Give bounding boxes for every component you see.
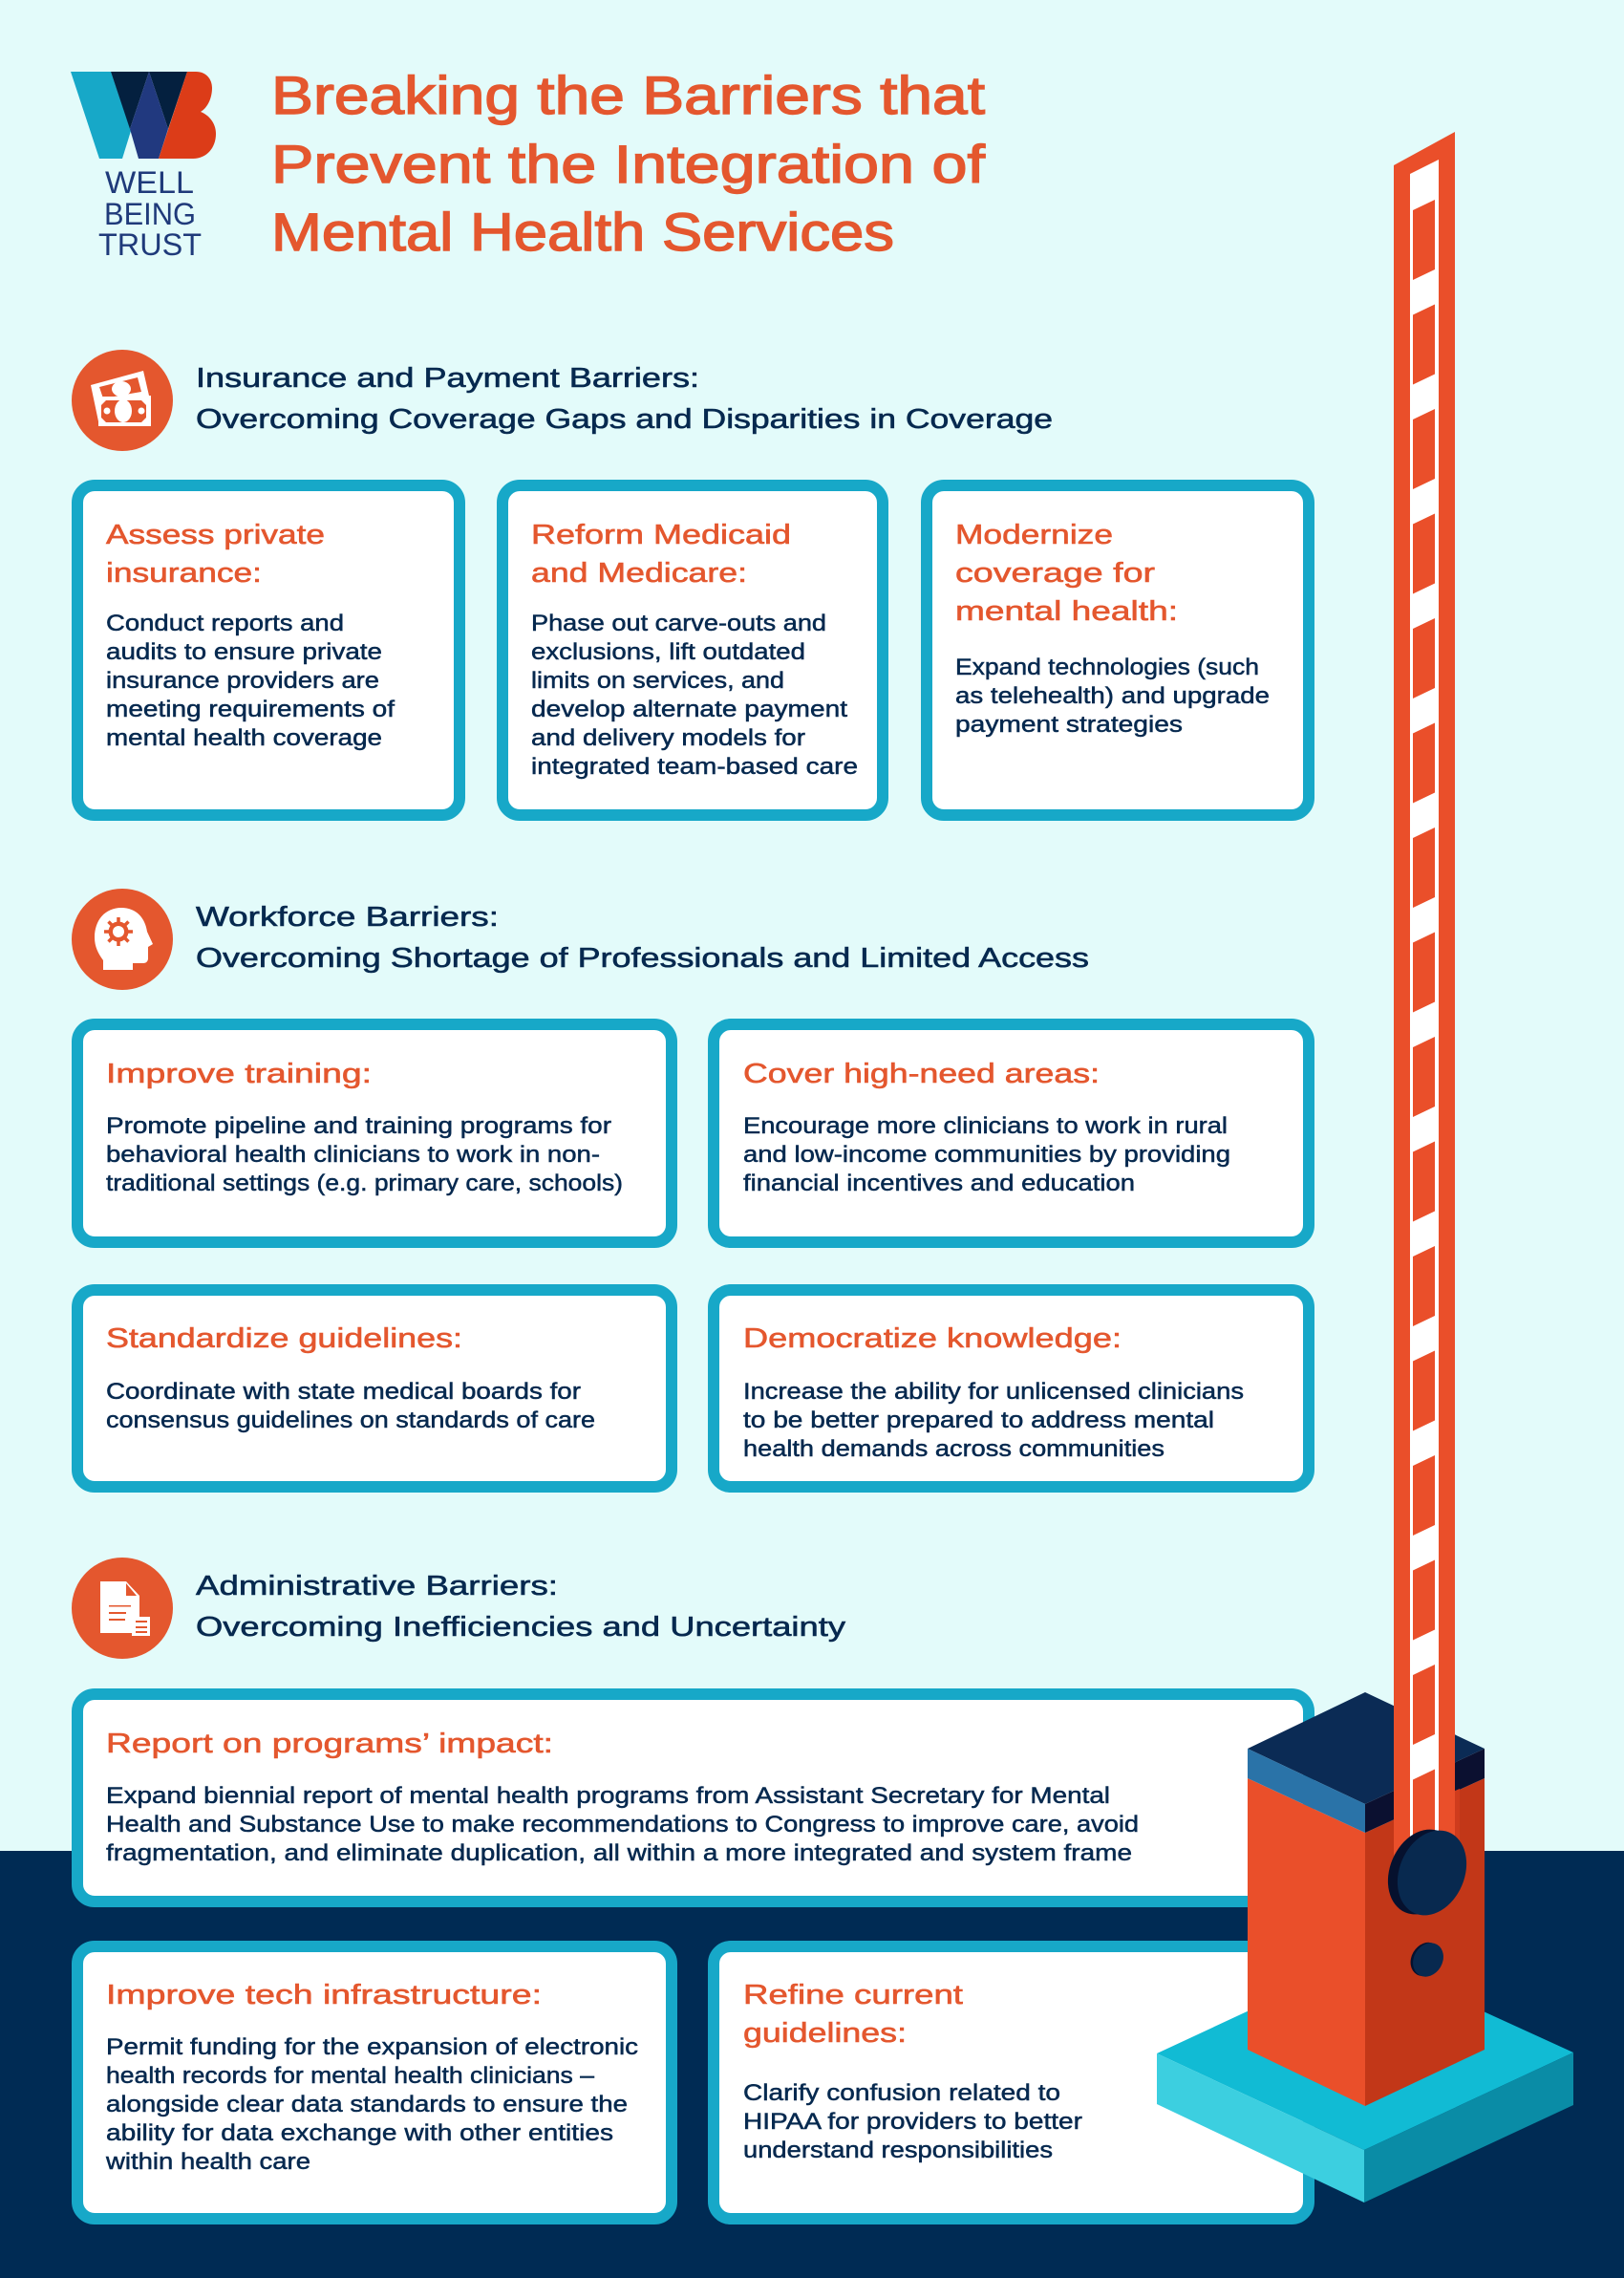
panel: assess private insurance: Assess private: [106, 520, 325, 550]
panel: assess private insurance: insurance:: [106, 558, 262, 589]
panel: reform Medicaid and Medicare: Reform Medicaid: [531, 520, 791, 550]
panel: standardize guidelines: [77, 1290, 672, 1487]
panel: cover high-need areas: [714, 1024, 1309, 1242]
panel: assess private insurance: audits to ensure private: [106, 639, 382, 665]
panel: refine current guidelines: guidelines:: [743, 2018, 907, 2049]
panel: modernize coverage for mental health: [927, 485, 1309, 815]
gate post box: [1248, 1692, 1485, 2106]
panel: reform Medicaid and Medicare: limits on services, and: [531, 668, 784, 694]
section heading: insurance and payment barriers: Overcoming Coverage Gaps and Disparities in Coverage: [196, 404, 1053, 435]
pivot knob: [1376, 1818, 1479, 1926]
panel: reform Medicaid and Medicare: Phase out carve-outs and: [531, 611, 826, 636]
panel: assess private insurance: insurance providers are: [106, 668, 379, 694]
panel: improve tech infrastructure: Improve tech infrastructure:: [106, 1980, 542, 2010]
logo: Well Being Trust: TRUST: [98, 227, 202, 262]
panel: reform Medicaid and Medicare: and Medicare:: [531, 558, 747, 589]
panel: reform Medicaid and Medicare: [502, 485, 883, 815]
panel: refine current guidelines: Clarify confusion related to: [743, 2080, 1060, 2106]
small knob: [1404, 1937, 1449, 1983]
panel: modernize coverage for mental health: coverage for: [955, 558, 1155, 589]
panel: democratize knowledge: health demands across communities: [743, 1436, 1165, 1462]
logo: Well Being Trust: [71, 72, 216, 262]
panel: improve training: [77, 1024, 672, 1242]
panel: modernize coverage for mental health: Modernize: [955, 520, 1113, 550]
panel: report on programs' impact: Expand biennial report of mental health programs from Assistant Secretary for Mental: [106, 1783, 1110, 1809]
panel: improve tech infrastructure: ability for data exchange with other entities: [106, 2120, 613, 2146]
panel: cover high-need areas: financial incentives and education: [743, 1171, 1135, 1196]
section heading: workforce barriers: [72, 889, 1089, 990]
panel: modernize coverage for mental health: Expand technologies (such: [955, 655, 1259, 680]
section heading: administrative barriers: Administrative Barriers:: [196, 1571, 558, 1601]
panel: democratize knowledge: [714, 1290, 1309, 1487]
panel: report on programs' impact: [77, 1694, 1309, 1902]
panel: standardize guidelines: Coordinate with state medical boards for: [106, 1379, 581, 1405]
panel: modernize coverage for mental health: as telehealth) and upgrade: [955, 683, 1270, 709]
gate base platform: [1157, 1957, 1573, 2203]
panel: improve tech infrastructure: health records for mental health clinicians –: [106, 2063, 595, 2089]
panel: assess private insurance: Conduct reports and: [106, 611, 344, 636]
panel: standardize guidelines: Standardize guidelines:: [106, 1323, 462, 1354]
logo: Well Being Trust: BEING: [104, 197, 196, 231]
panel: reform Medicaid and Medicare: integrated team-based care: [531, 754, 858, 780]
panel: reform Medicaid and Medicare: and delivery models for: [531, 725, 805, 751]
panel: improve training: Promote pipeline and training programs for: [106, 1113, 611, 1139]
panel: cover high-need areas: Encourage more clinicians to work in rural: [743, 1113, 1228, 1139]
panel: report on programs' impact: fragmentation, and eliminate duplication, all within a more integrated and system frame: [106, 1840, 1132, 1866]
panel: modernize coverage for mental health: mental health:: [955, 596, 1178, 627]
icon: head with gear: [95, 908, 153, 970]
panel: assess private insurance: [77, 485, 459, 815]
title: Mental Health Services: [271, 202, 894, 262]
panel: refine current guidelines: understand responsibilities: [743, 2138, 1053, 2163]
section heading: administrative barriers: [72, 1558, 846, 1659]
panel: report on programs' impact: Report on programs’ impact:: [106, 1729, 553, 1759]
panel: improve tech infrastructure: within health care: [105, 2149, 310, 2175]
panel: standardize guidelines: consensus guidelines on standards of care: [106, 1408, 595, 1433]
panel: improve training: traditional settings (e.g. primary care, schools): [106, 1171, 623, 1196]
panel: assess private insurance: mental health coverage: [106, 725, 382, 751]
panel: improve tech infrastructure: [77, 1946, 672, 2219]
section heading: workforce barriers: Workforce Barriers:: [196, 902, 499, 933]
icon: document: [100, 1581, 150, 1636]
panel: democratize knowledge: Democratize knowledge:: [743, 1323, 1122, 1354]
panel: democratize knowledge: to be better prepared to address mental: [743, 1408, 1214, 1433]
section heading: administrative barriers: Overcoming Inefficiencies and Uncertainty: [196, 1612, 846, 1643]
title: [271, 65, 986, 262]
panel: cover high-need areas: and low-income communities by providing: [743, 1142, 1230, 1168]
icon: money bills: [91, 371, 151, 426]
panel: modernize coverage for mental health: payment strategies: [955, 712, 1183, 738]
panel: improve training: Improve training:: [106, 1059, 372, 1089]
panel: cover high-need areas: Cover high-need areas:: [743, 1059, 1100, 1089]
title: Prevent the Integration of: [271, 134, 986, 194]
logo: Well Being Trust: WELL: [105, 165, 194, 200]
panel: improve tech infrastructure: alongside clear data standards to ensure the: [106, 2092, 628, 2117]
panel: improve tech infrastructure: Permit funding for the expansion of electronic: [106, 2034, 638, 2060]
panel: refine current guidelines: [714, 1946, 1309, 2219]
panel: reform Medicaid and Medicare: develop alternate payment: [531, 697, 847, 722]
section heading: workforce barriers: Overcoming Shortage of Professionals and Limited Access: [196, 943, 1089, 974]
striped barrier arm: [1394, 132, 1455, 1859]
barrier gate illustration: [1157, 132, 1573, 2203]
panel: improve training: behavioral health clinicians to work in non-: [106, 1142, 600, 1168]
panel: democratize knowledge: Increase the ability for unlicensed clinicians: [743, 1379, 1244, 1405]
section heading: insurance and payment barriers: [72, 350, 1053, 451]
panel: reform Medicaid and Medicare: exclusions, lift outdated: [531, 639, 805, 665]
panel: refine current guidelines: Refine current: [743, 1980, 963, 2010]
section heading: insurance and payment barriers: Insurance and Payment Barriers:: [196, 363, 699, 394]
title: Breaking the Barriers that: [271, 65, 986, 125]
panel: refine current guidelines: HIPAA for providers to better: [743, 2109, 1082, 2135]
panel: report on programs' impact: Health and Substance Use to make recommendations to Congress to improve care, avoid: [106, 1812, 1139, 1837]
panel: assess private insurance: meeting requirements of: [106, 697, 395, 722]
